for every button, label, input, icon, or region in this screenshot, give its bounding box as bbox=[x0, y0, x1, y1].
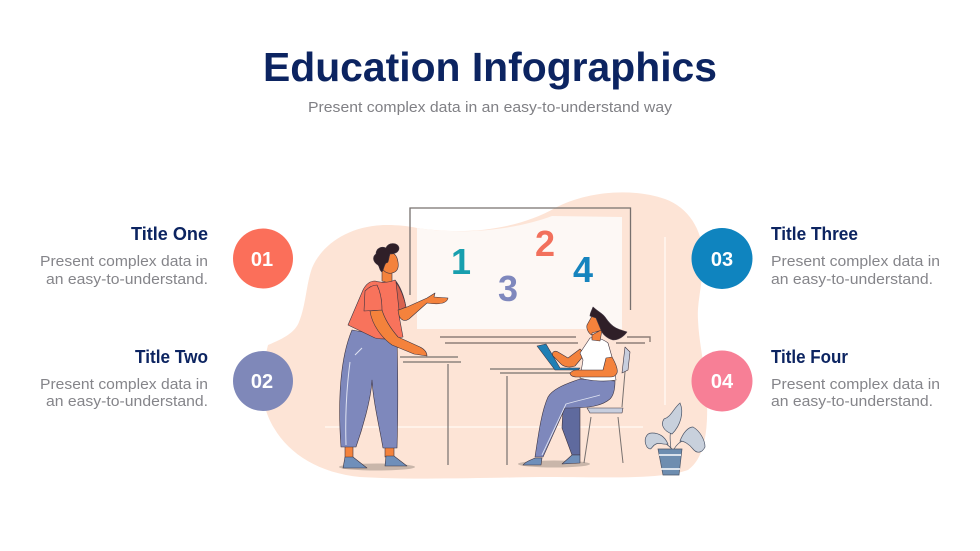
badge 01: 01 bbox=[251, 249, 273, 271]
description: Present complex data in bbox=[40, 376, 208, 393]
number 3: 3 bbox=[498, 268, 518, 309]
badge 03: 03 bbox=[711, 249, 733, 271]
whiteboard bbox=[410, 208, 630, 329]
desk right bbox=[490, 369, 570, 465]
number 4: 4 bbox=[573, 249, 593, 290]
illustration: classroom scene bbox=[262, 192, 707, 479]
item: Title Two bbox=[40, 347, 293, 411]
description bbox=[771, 376, 940, 410]
chair bbox=[584, 347, 630, 463]
badge 01 bbox=[233, 228, 293, 288]
description: an easy-to-understand. bbox=[46, 271, 208, 288]
wall and floor lines bbox=[325, 237, 665, 427]
background blob bbox=[262, 192, 707, 479]
badge 03 bbox=[692, 228, 752, 289]
item: Title One bbox=[40, 224, 293, 288]
description: Present complex data in bbox=[771, 253, 940, 270]
number 2: 2 bbox=[535, 223, 555, 264]
plant bbox=[645, 403, 705, 475]
description: Present complex data in bbox=[40, 253, 208, 270]
description bbox=[771, 253, 940, 288]
figure: student bbox=[518, 307, 630, 468]
badge 04: 04 bbox=[711, 371, 734, 393]
description: Present complex data in bbox=[771, 376, 940, 393]
heading: Title Three bbox=[771, 224, 858, 244]
badge 04 bbox=[692, 350, 752, 412]
item: Title Four bbox=[692, 347, 940, 412]
heading: Title One bbox=[131, 224, 208, 244]
description bbox=[40, 253, 208, 288]
badge 02: 02 bbox=[251, 371, 273, 393]
figure: teacher bbox=[339, 244, 448, 470]
title: Education Infographics bbox=[263, 44, 717, 90]
item: Title Three bbox=[692, 224, 940, 289]
heading: Title Four bbox=[771, 347, 848, 367]
subtitle: Present complex data in an easy-to-understand way bbox=[308, 99, 673, 116]
description bbox=[40, 376, 208, 410]
description: an easy-to-understand. bbox=[771, 271, 933, 288]
description: an easy-to-understand. bbox=[46, 393, 208, 410]
laptop bbox=[537, 344, 580, 370]
heading: Title Two bbox=[135, 347, 208, 367]
badge 02 bbox=[233, 351, 293, 411]
number 1: 1 bbox=[451, 241, 471, 282]
description: an easy-to-understand. bbox=[771, 393, 933, 410]
desk left bbox=[400, 357, 461, 465]
